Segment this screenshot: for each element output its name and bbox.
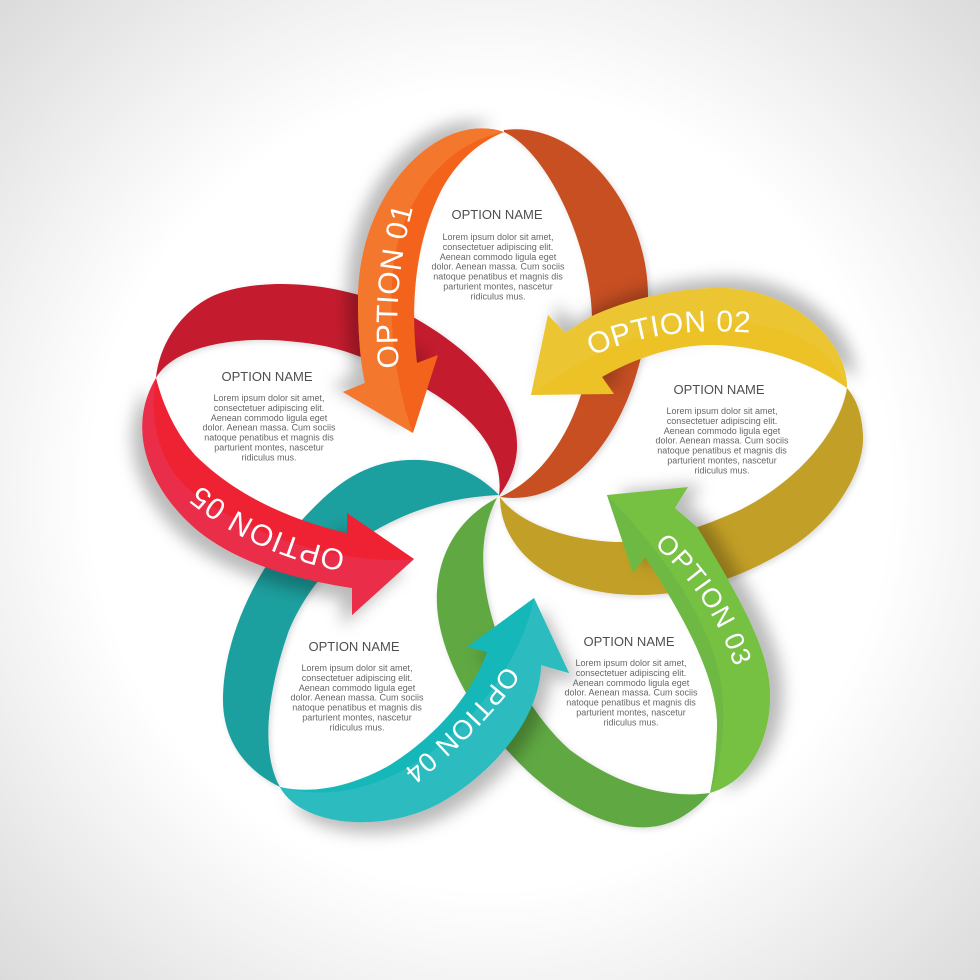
- text block: option 01: OPTION NAME: [451, 207, 543, 222]
- text block: option 04: OPTION NAME: [308, 639, 400, 654]
- text block: option 01: consectetuer adipiscing elit.: [443, 242, 553, 252]
- text block: option 02: [655, 382, 789, 475]
- text block: option 01: parturient montes, nascetur: [443, 282, 553, 292]
- text block: option 02: dolor. Aenean massa. Cum sociis: [655, 436, 789, 446]
- text block: option 04: Lorem ipsum dolor sit amet,: [301, 663, 413, 673]
- text block: option 05: parturient montes, nascetur: [214, 442, 324, 452]
- label: option 01: OPTION 01: [376, 208, 413, 368]
- text block: option 03: [564, 634, 698, 727]
- arrow: option 02 yellow: [531, 288, 847, 395]
- text block: option 01: natoque penatibus et magnis dis: [433, 272, 563, 282]
- text block: option 04: natoque penatibus et magnis dis: [292, 703, 422, 713]
- text block: option 01: dolor. Aenean massa. Cum sociis: [431, 262, 565, 272]
- arrow: option 01 orange: [343, 128, 504, 433]
- band: option 01 brown: [500, 129, 648, 498]
- band: option 03 dark green: [437, 498, 710, 827]
- label: option 02: OPTION 02: [588, 310, 750, 353]
- text block: option 02: parturient montes, nascetur: [667, 456, 777, 466]
- band: option 02 olive: [500, 388, 863, 595]
- text block: option 04: [290, 639, 424, 732]
- text block: option 05: consectetuer adipiscing elit.: [214, 403, 324, 413]
- text block: option 01: Lorem ipsum dolor sit amet,: [442, 232, 554, 242]
- text block: option 03: ridiculus mus.: [603, 717, 659, 727]
- text block: option 05: natoque penatibus et magnis dis: [204, 433, 334, 443]
- text block: option 05: ridiculus mus.: [241, 452, 297, 462]
- text block: option 03: parturient montes, nascetur: [576, 708, 686, 718]
- text block: option 02: natoque penatibus et magnis dis: [657, 446, 787, 456]
- text block: option 04: dolor. Aenean massa. Cum sociis: [290, 693, 424, 703]
- text block: option 05: Lorem ipsum dolor sit amet,: [213, 393, 325, 403]
- text block: option 03: OPTION NAME: [583, 634, 675, 649]
- text block: option 02: ridiculus mus.: [694, 465, 750, 475]
- arrow: option 03 green: [607, 487, 770, 793]
- text block: option 03: natoque penatibus et magnis dis: [566, 698, 696, 708]
- text block: option 05: [202, 369, 336, 462]
- text block: option 05: OPTION NAME: [221, 369, 313, 384]
- text block: option 03: consectetuer adipiscing elit.: [576, 668, 686, 678]
- text block: option 01: Aenean commodo ligula eget: [440, 252, 557, 262]
- text block: option 02: Lorem ipsum dolor sit amet,: [666, 406, 778, 416]
- label: option 05: OPTION 05: [190, 488, 343, 570]
- arrow: option 05 red: [142, 378, 414, 615]
- text block: option 05: dolor. Aenean massa. Cum sociis: [202, 423, 336, 433]
- text block: option 03: dolor. Aenean massa. Cum sociis: [564, 688, 698, 698]
- background ribbon bands: [156, 129, 863, 827]
- text block: option 03: Aenean commodo ligula eget: [573, 678, 690, 688]
- arrow: option 04 teal: [280, 598, 569, 822]
- band: option 04 dark teal: [223, 460, 499, 787]
- band: option 05 crimson: [156, 284, 517, 496]
- text block: option 02: Aenean commodo ligula eget: [664, 426, 781, 436]
- text block: option 05: Aenean commodo ligula eget: [211, 413, 328, 423]
- text block: option 04: consectetuer adipiscing elit.: [302, 673, 412, 683]
- label: option 03: OPTION 03: [658, 536, 750, 664]
- text block: option 02: consectetuer adipiscing elit.: [667, 416, 777, 426]
- text block: option 04: Aenean commodo ligula eget: [299, 683, 416, 693]
- text block: option 01: ridiculus mus.: [470, 291, 526, 301]
- text block: option 03: Lorem ipsum dolor sit amet,: [575, 658, 687, 668]
- text block: option 02: OPTION NAME: [673, 382, 765, 397]
- text block: option 04: ridiculus mus.: [329, 722, 385, 732]
- label: option 04: OPTION 04: [406, 669, 518, 782]
- text block: option 01: [431, 207, 565, 301]
- text block: option 04: parturient montes, nascetur: [302, 712, 412, 722]
